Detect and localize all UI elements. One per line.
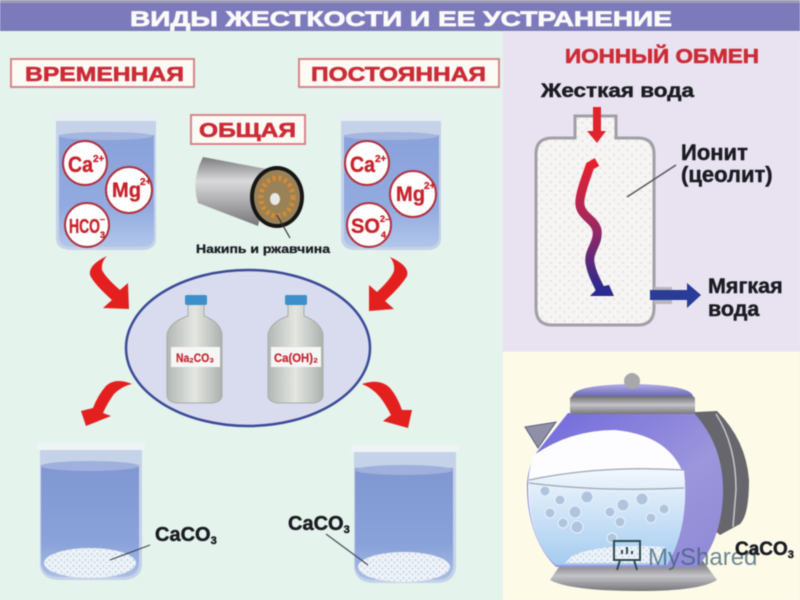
leader line: [326, 534, 368, 565]
label: hard water: Жесткая вода: [540, 81, 695, 102]
kettle knob: [624, 373, 640, 389]
ion: sulfate: [347, 203, 391, 247]
ion: sulfate: SO: [351, 215, 380, 238]
badge: permanent hardness: [299, 59, 499, 87]
precipitate: [358, 552, 450, 582]
water path foot: [590, 285, 614, 296]
label: calcium carbonate: CaCO: [288, 513, 344, 535]
ion exchange vessel: [536, 116, 654, 325]
badge: total hardness: [191, 115, 305, 144]
bubbles: [540, 486, 669, 543]
precipitate: [44, 548, 136, 578]
kettle handle highlight: [716, 414, 736, 527]
beaker: left with precipitate: [37, 443, 217, 580]
watermark text: MyShared: [648, 544, 757, 571]
panel: kettle: [503, 352, 800, 600]
ion: magnesium: [106, 167, 152, 213]
label: calcium carbonate: 3: [344, 524, 350, 536]
badge: temporary hardness: [11, 59, 194, 87]
label: scale and rust: Накипь и ржавчина: [196, 242, 330, 256]
bottle: calcium hydroxide: Ca(OH)₂: [274, 351, 318, 365]
label: ion exchanger: Ионит: [681, 140, 748, 165]
ion: bicarbonate: [65, 203, 109, 247]
label: ion exchanger: (цеолит): [681, 162, 773, 187]
bottle: calcium hydroxide: [268, 295, 323, 403]
arrow: reagents to right beaker: [362, 382, 412, 428]
pipe with scale and rust: [195, 157, 330, 256]
outlet pipe: [654, 287, 672, 304]
ion: magnesium: 2+: [424, 181, 436, 192]
label: calcium carbonate in kettle: CaCO: [735, 539, 788, 560]
kettle lid: [572, 384, 693, 396]
ion: magnesium: [390, 171, 436, 217]
kettle spout: [525, 422, 556, 448]
kettle handle: [676, 411, 749, 535]
ion: sulfate: 4: [381, 230, 386, 240]
scale deposit: [565, 546, 665, 563]
kettle water: [529, 469, 685, 565]
ion: bicarbonate: 3: [100, 230, 105, 240]
ion: bicarbonate: HCO: [69, 216, 100, 238]
label: soft water: вода: [708, 297, 760, 321]
arrow: temporary beaker to reagents: [90, 256, 129, 309]
bottle: sodium carbonate: Na₂CO₃: [176, 351, 214, 365]
ion: calcium: 2+: [93, 154, 105, 165]
badge: total hardness: ОБЩАЯ: [199, 120, 296, 142]
water surface: [529, 469, 684, 489]
kettle lid band: [570, 396, 695, 414]
arrow: reagents to left beaker: [81, 381, 132, 426]
label: calcium carbonate: 3: [211, 535, 217, 547]
heading: ion exchange: ИОННЫЙ ОБМЕН: [565, 44, 759, 68]
ion: bicarbonate: –: [100, 214, 105, 224]
ion: calcium: [345, 141, 389, 185]
ion: magnesium: 2+: [140, 177, 152, 188]
kettle body: [527, 413, 723, 567]
beaker: permanent hardness ions: [337, 113, 444, 250]
label: calcium carbonate: CaCO: [155, 524, 211, 546]
title bar: [0, 0, 800, 31]
reagents ellipse: [126, 270, 370, 426]
badge: temporary hardness: ВРЕМЕННАЯ: [25, 64, 184, 86]
beaker: temporary hardness ions: [52, 113, 159, 250]
ion: calcium: [63, 141, 107, 185]
arrow: permanent beaker to reagents: [369, 257, 407, 311]
kettle glass window: [528, 430, 685, 565]
arrow: soft water out: [650, 283, 701, 308]
leader line: ion exchanger: [627, 165, 676, 197]
leader line: [110, 545, 150, 560]
panel: ion exchange: [503, 32, 800, 351]
title bar: ВИДЫ ЖЕСТКОСТИ И ЕЕ УСТРАНЕНИЕ: [130, 8, 672, 31]
kettle base: [550, 561, 717, 591]
watermark icon: [614, 541, 640, 570]
ion: calcium: Ca: [68, 152, 94, 177]
label: calcium carbonate in kettle: 3: [788, 549, 794, 561]
badge: permanent hardness: ПОСТОЯННАЯ: [311, 64, 486, 86]
ion: magnesium: Mg: [112, 179, 141, 202]
beaker: right with precipitate: [288, 445, 459, 583]
arrow: hard water in: [587, 107, 606, 143]
water path through resin: [580, 162, 600, 289]
ion: calcium: Ca: [350, 152, 376, 177]
ion: calcium: 2+: [375, 154, 387, 165]
label: soft water: Мягкая: [708, 274, 783, 298]
bottle: sodium carbonate: [167, 295, 222, 403]
ion: sulfate: 2–: [380, 214, 390, 224]
ion: magnesium: Mg: [396, 183, 425, 206]
